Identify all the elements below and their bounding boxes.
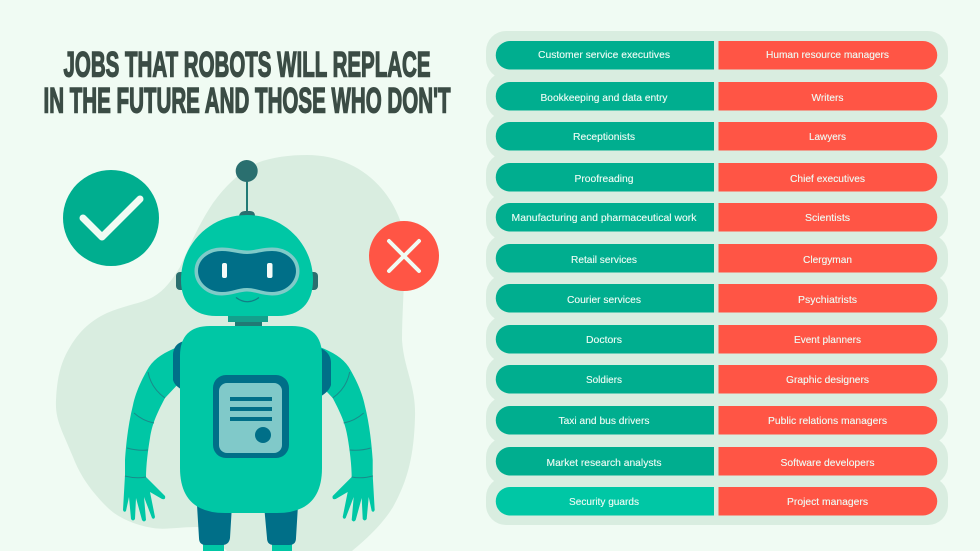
row 9 right: Graphic designers: [786, 374, 869, 386]
row 3 left: Receptionists: [573, 131, 635, 143]
row 11 left: [496, 447, 714, 476]
row 1 right: [718, 41, 937, 70]
row 12 left: Security guards: [569, 496, 639, 508]
row 6 left: [496, 244, 714, 272]
robot legs: [197, 505, 298, 551]
robot shoulders: [173, 341, 331, 398]
row 8 right: [718, 325, 937, 354]
row 10 right: Public relations managers: [768, 415, 887, 427]
robot smile: [236, 298, 259, 302]
robot visor: [198, 251, 296, 292]
robot antenna: [236, 160, 258, 216]
row 2 left: Bookkeeping and data entry: [540, 92, 668, 104]
row 3 right: Lawyers: [809, 131, 846, 143]
row 6 right: [718, 244, 937, 272]
row 9 left: Soldiers: [586, 374, 622, 386]
robot body: [180, 326, 322, 513]
row 1 right: Human resource managers: [766, 49, 889, 61]
robot right arm: [318, 347, 375, 522]
icon: cross mark: [369, 221, 439, 291]
robot chest screen: [213, 375, 289, 458]
title: [44, 46, 450, 120]
row 12 right: Project managers: [787, 496, 868, 508]
title: IN THE FUTURE AND THOSE WHO DON'T: [44, 82, 450, 120]
table backdrop: [486, 31, 948, 525]
robot ears: [176, 272, 318, 290]
row 8 right: Event planners: [794, 334, 861, 346]
row 7 right: Psychiatrists: [798, 294, 857, 306]
row 7 left: [496, 284, 714, 312]
row 4 left: Proofreading: [574, 173, 634, 185]
row 2 right: [718, 82, 937, 110]
icon: check mark: [63, 170, 159, 266]
row 9 left: [496, 365, 714, 394]
row 3 left: [496, 122, 714, 150]
row 4 right: Chief executives: [790, 173, 865, 185]
row 5 right: [718, 203, 937, 232]
row 10 left: [496, 406, 714, 434]
row 6 right: Clergyman: [803, 254, 852, 266]
row 11 right: [718, 447, 937, 476]
row 12 left: [496, 487, 714, 516]
row 4 left: [496, 163, 714, 192]
row 7 right: [718, 284, 937, 312]
row 12 right: [718, 487, 937, 516]
row 10 right: [718, 406, 937, 434]
row 5 right: Scientists: [805, 212, 850, 224]
row 2 left: [496, 82, 714, 110]
row 5 left: [496, 203, 714, 232]
left column: jobs robots will replace: [496, 41, 714, 516]
row 8 left: Doctors: [586, 334, 622, 346]
row 10 left: Taxi and bus drivers: [558, 415, 650, 427]
row 11 left: Market research analysts: [546, 457, 662, 469]
row 6 left: Retail services: [571, 254, 637, 266]
robot illustration: [123, 160, 375, 551]
right column: jobs robots will not replace: [718, 41, 937, 516]
title: JOBS THAT ROBOTS WILL REPLACE: [64, 46, 430, 84]
row 7 left: Courier services: [567, 294, 641, 306]
row 11 right: Software developers: [780, 457, 874, 469]
row 9 right: [718, 365, 937, 394]
robot head: [181, 215, 313, 316]
row 3 right: [718, 122, 937, 150]
background blob: [56, 155, 415, 551]
robot left arm: [123, 347, 180, 522]
row 1 left: [496, 41, 714, 70]
robot neck: [228, 314, 268, 328]
row 1 left: Customer service executives: [538, 49, 670, 61]
row 4 right: [718, 163, 937, 192]
row 8 left: [496, 325, 714, 354]
row 2 right: Writers: [812, 92, 844, 104]
row 5 left: Manufacturing and pharmaceutical work: [512, 212, 697, 224]
